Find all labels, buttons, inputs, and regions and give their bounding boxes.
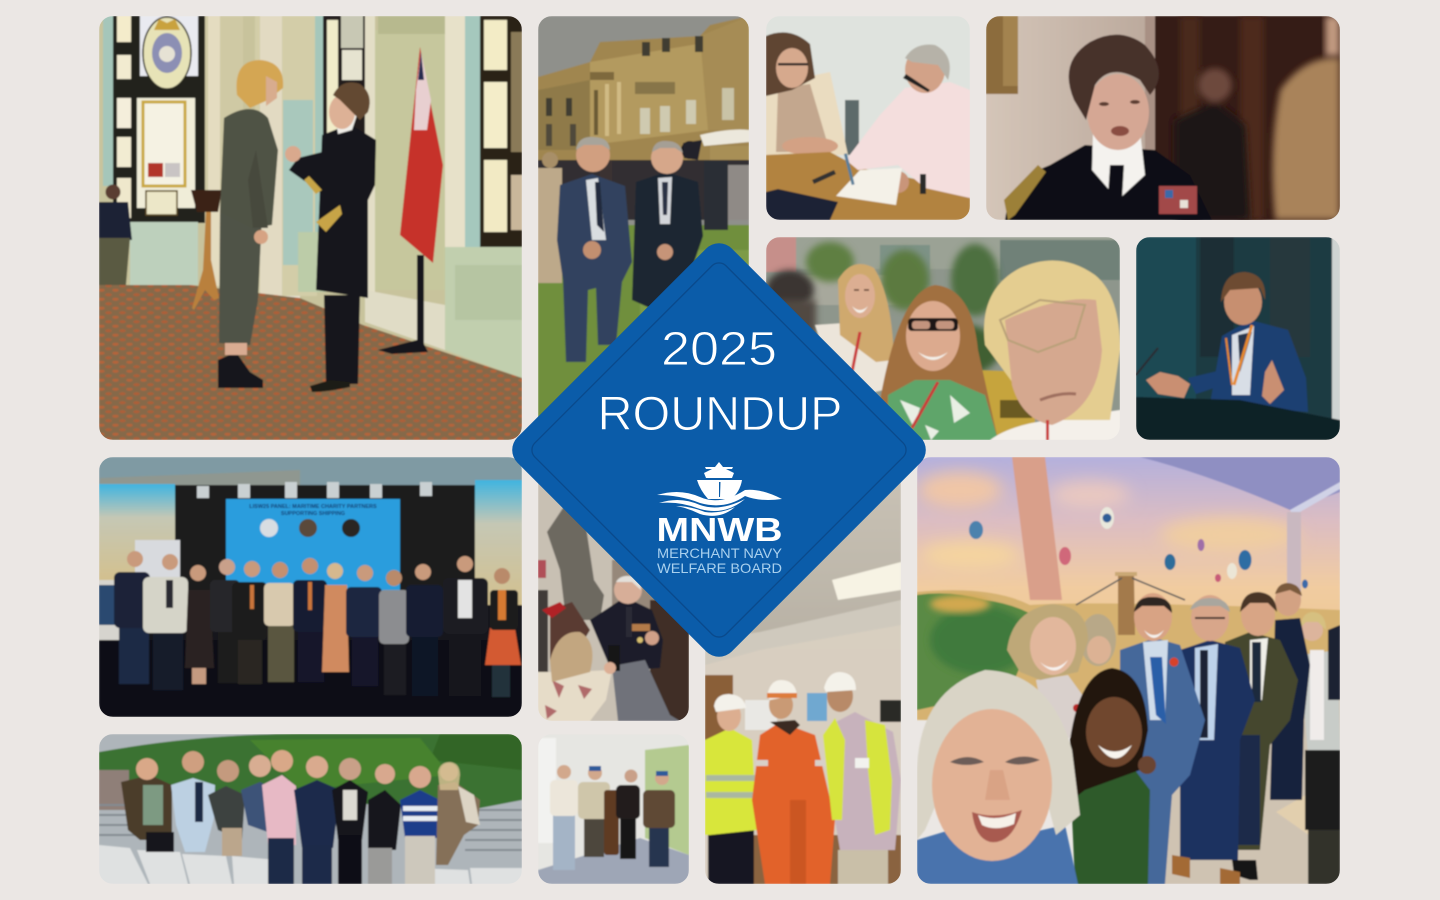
man in green jacket: [1225, 592, 1298, 880]
palace: [538, 18, 749, 161]
man in blue suit: [557, 137, 632, 362]
photo: group selfie before Bristol mural: [917, 457, 1340, 884]
woman in green polo neck: [1070, 668, 1156, 884]
blurred blonde hair: [1272, 58, 1340, 220]
man in navy polo with glasses: [1270, 583, 1310, 800]
woman in white top: [550, 765, 578, 870]
document and pen: [812, 153, 902, 205]
organisation name line 2: WELFARE BOARD: [657, 560, 782, 576]
carpet floor: [99, 285, 522, 440]
palm foliage: [766, 242, 1000, 376]
man in navy suit with glasses: [1172, 595, 1255, 884]
man in hi-vis with pink shirt: [823, 672, 901, 884]
photo: team group at cricket stadium: [99, 734, 522, 884]
photo: signing at a desk: [766, 16, 970, 220]
blonde woman with lanyard: [815, 264, 894, 400]
photo: two men at Buckingham Palace garden party: [538, 16, 749, 440]
woman with glasses in green dress: [880, 285, 998, 440]
man in blue suit with poppy: [1120, 593, 1205, 884]
floor and wall below: [1100, 700, 1340, 884]
man in cap and brown blazer: [643, 771, 675, 867]
far background women: [1300, 612, 1340, 830]
inner outline: [528, 259, 910, 641]
woman in black: [616, 770, 640, 859]
ten team members: [121, 750, 480, 884]
man in dark overcoat: [632, 140, 703, 308]
organisation name line 1: MERCHANT NAVY: [657, 545, 783, 561]
Princess Royal in naval uniform: [285, 82, 376, 392]
woman with blonde bob in foreground: [984, 260, 1120, 440]
suspension bridge: [1076, 572, 1185, 635]
seated guest: [99, 184, 132, 285]
LED screen: [226, 499, 400, 591]
photo: Princess Royal close-up: [986, 16, 1340, 220]
centre window: [322, 16, 366, 136]
left stained glass window: [113, 16, 205, 223]
green landscape: [917, 590, 1340, 720]
stand rows: [99, 805, 522, 850]
woman in yellow hi-vis: [705, 694, 757, 884]
group of panellists: [114, 551, 521, 697]
year heading: 2025: [661, 323, 777, 376]
sky clouds: [918, 472, 1300, 569]
right window: [480, 16, 522, 248]
floor: [99, 640, 522, 717]
blurred background man: [1175, 68, 1250, 220]
red ensign flag: [378, 47, 443, 354]
woman with red hat: [542, 602, 590, 660]
woman in cream waistcoat: [766, 32, 848, 155]
central blue diamond badge: [505, 236, 933, 664]
notices on the wall: [745, 693, 901, 730]
photo: speaker at lectern: [1136, 237, 1340, 440]
Princess Royal portrait: [1004, 35, 1212, 220]
crowd: [538, 141, 749, 283]
lectern: [191, 190, 222, 310]
LED screen: LISW25 PANEL: MARITIME CHARITY PARTNERS: [249, 504, 377, 510]
hot air balloons: [969, 507, 1308, 588]
kneeling woman in floral top: [538, 632, 620, 721]
LED screen: SUPPORTING SHIPPING: [281, 511, 345, 517]
MNWB wordmark: MNWB: [656, 511, 782, 548]
photo: four people with ship's telegraph: [538, 734, 689, 884]
speaker in navy jacket: [1146, 272, 1308, 412]
ship's telegraph: [604, 790, 619, 855]
ceiling: [1140, 457, 1340, 510]
table: [1276, 775, 1340, 845]
man in cap and cream blazer: [578, 766, 610, 857]
microphone: [1136, 348, 1158, 375]
man in pink shirt: [846, 45, 970, 198]
woman in grey suit: [218, 60, 283, 388]
veteran in wheelchair: [590, 576, 680, 721]
stage lights: [197, 482, 432, 498]
woman with blonde hair and floral top: [1007, 604, 1088, 740]
photo: LISW25 panel group on stage: [99, 457, 522, 717]
lectern: [1136, 397, 1340, 440]
photo: crew in hard hats and hi-vis: [705, 470, 901, 884]
white stadium seats: [99, 845, 522, 884]
photo: Princess Royal presenting award: [99, 16, 522, 440]
foreground woman taking the selfie: [917, 670, 1080, 884]
photo: veteran with medals: [538, 470, 689, 721]
man in orange boiler suit: [752, 680, 835, 884]
MNWB logo: ship and waves: [657, 462, 782, 516]
wooden table: [766, 152, 970, 220]
woman behind, partly hidden: [1080, 614, 1116, 666]
painted pillars: [1012, 457, 1062, 600]
ceiling light: [832, 562, 901, 600]
roundup heading: ROUNDUP: [598, 388, 842, 441]
shadow silhouette: [547, 505, 604, 620]
photo: three women selfie at conference: [766, 237, 1120, 440]
framed photo: [766, 189, 838, 220]
